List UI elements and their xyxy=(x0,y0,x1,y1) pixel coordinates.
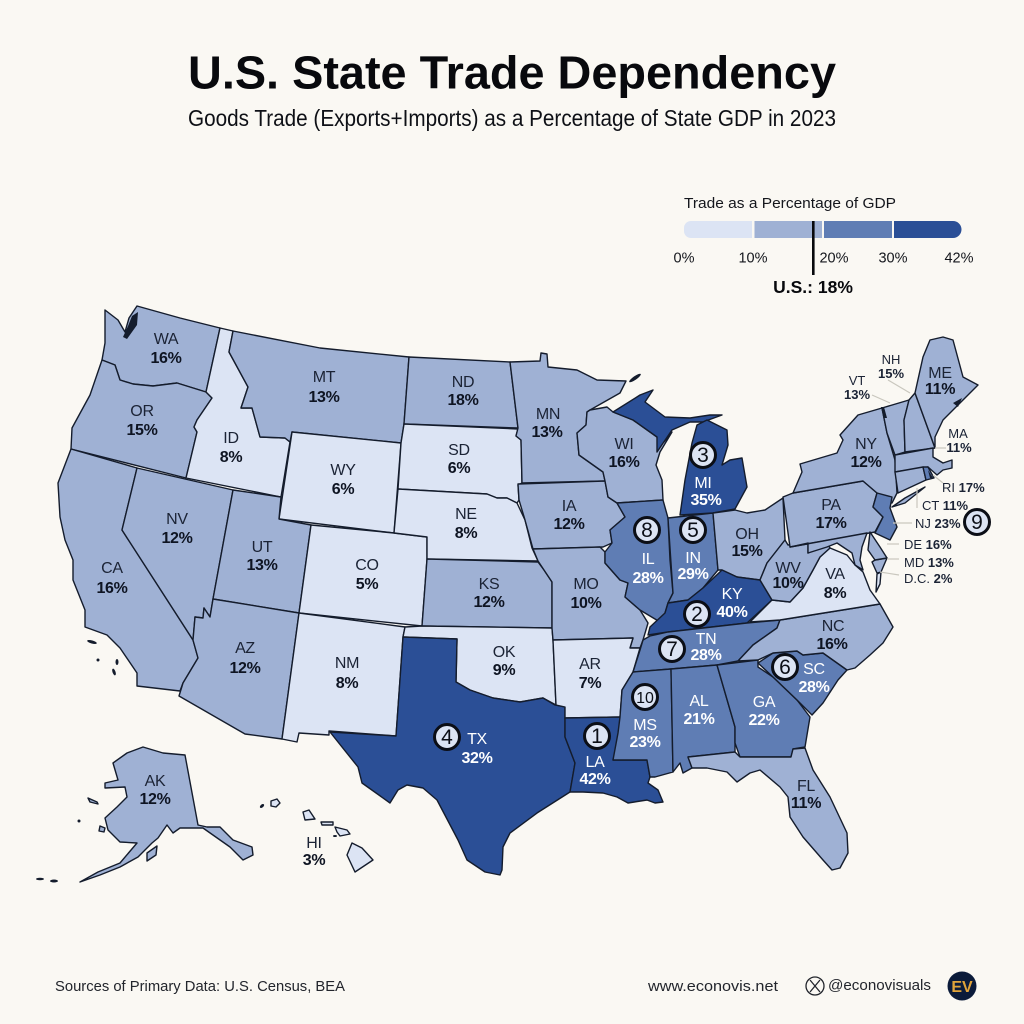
label: NH: NH xyxy=(882,352,900,367)
state: SD: SD xyxy=(448,442,470,459)
state: NM: 8% xyxy=(336,675,358,692)
state: MO xyxy=(533,547,648,648)
state: MI xyxy=(613,390,747,515)
label: MA xyxy=(946,426,972,455)
state: MN: MN xyxy=(536,406,560,423)
state: AL xyxy=(671,665,735,773)
subtitle: Goods Trade (Exports+Imports) as a Percentage of State GDP in 2023 xyxy=(188,105,836,131)
state: PA: PA xyxy=(821,497,841,514)
state: OH: OH xyxy=(735,526,759,543)
state: IN: 29% xyxy=(677,566,709,583)
legend title: Trade as a Percentage of GDP xyxy=(684,195,896,212)
legend scale labels: 20% xyxy=(819,250,849,266)
state: GA xyxy=(717,660,810,757)
map of U.S. states xyxy=(36,306,978,882)
state: WV: 10% xyxy=(772,575,804,592)
state: RI xyxy=(923,467,934,480)
state: TX: TX xyxy=(467,731,488,748)
label: VT: VT xyxy=(849,373,865,388)
Kodiak island xyxy=(147,846,157,861)
state: SC xyxy=(758,651,847,715)
state: TX xyxy=(330,637,575,875)
state: WY: WY xyxy=(330,462,356,479)
state: UT: 13% xyxy=(246,557,278,574)
legend scale labels: 42% xyxy=(944,250,974,266)
badge 3: 3 xyxy=(697,444,709,467)
state: LA: 42% xyxy=(579,771,611,788)
state: ND: ND xyxy=(452,374,474,391)
title: U.S. State Trade Dependency xyxy=(188,46,836,98)
icon: X logo xyxy=(806,977,824,995)
state: ME: ME xyxy=(928,365,952,382)
state: OK: OK xyxy=(493,644,516,661)
state: IA: 12% xyxy=(553,516,585,533)
state: LA: LA xyxy=(586,754,605,771)
badge 10: 10 xyxy=(636,690,654,707)
state: NH xyxy=(904,393,935,452)
U.S. average label: U.S.: 18% xyxy=(773,277,853,297)
state: OR: OR xyxy=(130,403,154,420)
social handle: @econovisuals xyxy=(828,977,931,994)
state: TN: TN xyxy=(696,631,716,648)
state: NE: NE xyxy=(455,506,477,523)
state: MI: 35% xyxy=(690,492,722,509)
state: VT xyxy=(882,400,909,455)
state: UT xyxy=(213,490,311,613)
state: IL: IL xyxy=(642,551,655,568)
state: HI: HI xyxy=(306,835,322,852)
state: IN: IN xyxy=(685,550,701,567)
state: AL: AL xyxy=(690,693,709,710)
label: NH: 15% xyxy=(878,366,904,381)
leader lines for northeastern states xyxy=(872,380,946,575)
state: MT: 13% xyxy=(308,389,340,406)
St. Lawrence and Nunivak islands xyxy=(88,798,98,804)
state: WI: WI xyxy=(615,436,633,453)
state: MS: MS xyxy=(633,717,657,734)
state: AL: 21% xyxy=(683,711,715,728)
state: KY: KY xyxy=(722,586,743,603)
badge 9: 9 xyxy=(971,511,983,534)
badge 8: 8 xyxy=(641,519,653,542)
state: AR: 7% xyxy=(579,675,601,692)
state: IA xyxy=(518,481,625,549)
Long Island xyxy=(892,487,925,507)
state: NV: NV xyxy=(166,511,188,528)
label: RI: RI 17% xyxy=(942,480,985,495)
state: NM xyxy=(282,613,405,742)
legend xyxy=(674,195,974,297)
badge 5: 5 xyxy=(687,519,699,542)
state: CO: 5% xyxy=(356,576,378,593)
state: WA xyxy=(102,306,220,392)
state: SD: 6% xyxy=(448,460,470,477)
state: MN: 13% xyxy=(531,424,563,441)
state: WY xyxy=(279,432,401,533)
label: D.C.: D.C. 2% xyxy=(904,571,953,586)
state: ID xyxy=(186,328,290,497)
state: FL: FL xyxy=(797,778,815,795)
state: SC: 28% xyxy=(798,679,830,696)
state: NV: 12% xyxy=(161,530,193,547)
state: SC: SC xyxy=(803,661,825,678)
state: MT: MT xyxy=(313,369,336,386)
state: CO xyxy=(299,525,427,626)
state: AZ xyxy=(179,599,299,739)
state: VA: VA xyxy=(825,566,845,583)
state: IL xyxy=(605,500,673,622)
legend scale labels: 0% xyxy=(674,250,695,266)
source note: Sources of Primary Data: U.S. Census, BEA xyxy=(55,979,345,995)
state: CT xyxy=(895,467,926,493)
state: TN xyxy=(633,620,780,672)
website: www.econovis.net xyxy=(647,978,779,995)
state: PA xyxy=(783,481,883,547)
state: OR xyxy=(71,360,212,478)
state: GA: 22% xyxy=(748,712,780,729)
state: ID: ID xyxy=(223,430,239,447)
legend scale labels: 30% xyxy=(878,250,908,266)
state: NY xyxy=(793,408,925,507)
state: CO: CO xyxy=(355,557,379,574)
state: NY: NY xyxy=(855,436,877,453)
state: MS: 23% xyxy=(629,734,661,751)
state: AK: 12% xyxy=(139,791,171,808)
state: NC: NC xyxy=(822,618,844,635)
state: MA xyxy=(895,448,952,475)
state: OH xyxy=(713,498,785,580)
state: WY: 6% xyxy=(332,481,354,498)
state: ME xyxy=(915,337,978,448)
state: ND: 18% xyxy=(447,392,479,409)
state: MI: MI xyxy=(694,475,712,492)
label: VT xyxy=(844,373,870,402)
badge 1: 1 xyxy=(591,725,603,748)
state: ID: 8% xyxy=(220,449,242,466)
state: PA: 17% xyxy=(815,515,847,532)
state: NE xyxy=(394,489,538,561)
state: TX: 32% xyxy=(461,750,493,767)
label: MA: 11% xyxy=(946,440,972,455)
badge 6: 6 xyxy=(779,656,791,679)
state: AK: AK xyxy=(145,773,166,790)
U.S. average marker xyxy=(812,221,815,275)
state: OR: 15% xyxy=(126,422,158,439)
state: VA xyxy=(750,548,880,622)
state: DE xyxy=(868,532,887,560)
state: ND xyxy=(404,357,518,428)
Virginia eastern shore xyxy=(876,572,881,592)
state: KY xyxy=(648,570,772,635)
state: AR xyxy=(553,638,640,718)
state: AZ: AZ xyxy=(235,640,255,657)
state: IA: IA xyxy=(562,498,577,515)
state: MS xyxy=(613,669,673,777)
badge 4: 4 xyxy=(441,726,453,749)
lake and coast details xyxy=(36,312,962,882)
state: GA: GA xyxy=(753,694,776,711)
label: MA: MA xyxy=(948,426,968,441)
badge 9 xyxy=(964,510,990,534)
state: CA: 16% xyxy=(96,580,128,597)
state: UT: UT xyxy=(252,539,273,556)
state: FL: 11% xyxy=(791,795,821,812)
label: VT: 13% xyxy=(844,387,870,402)
state: IN xyxy=(668,513,718,603)
badge 7: 7 xyxy=(666,638,678,661)
small state labels xyxy=(844,352,985,586)
state: HI xyxy=(271,799,373,872)
state: KS xyxy=(422,559,552,628)
state: WV xyxy=(760,540,830,602)
label: NH xyxy=(878,352,904,381)
state: IL: 28% xyxy=(632,570,664,587)
state: KY: 40% xyxy=(716,604,748,621)
state: NM: NM xyxy=(335,655,359,672)
state: KS: KS xyxy=(479,576,499,593)
state: OH: 15% xyxy=(731,543,763,560)
state: LA xyxy=(565,717,663,803)
state: VA: 8% xyxy=(824,585,846,602)
icon: EV logo: EV xyxy=(951,979,973,996)
state: FL xyxy=(688,748,848,870)
state: CA: CA xyxy=(101,560,123,577)
state: HI: 3% xyxy=(303,852,325,869)
label: MD: MD 13% xyxy=(904,555,954,570)
state: NJ xyxy=(873,493,897,540)
state: NC xyxy=(738,604,893,670)
label: NJ: NJ 23% xyxy=(915,516,961,531)
state: MD xyxy=(790,533,887,573)
state: OK xyxy=(403,626,556,705)
state: MT xyxy=(229,331,409,443)
state: NV xyxy=(122,468,233,640)
state: MO: 10% xyxy=(570,595,602,612)
state: CA xyxy=(58,449,198,691)
state: TN: 28% xyxy=(690,647,722,664)
state: AZ: 12% xyxy=(229,660,261,677)
icon: EV logo xyxy=(948,972,976,1000)
state: NY: 12% xyxy=(850,454,882,471)
state: WV: WV xyxy=(775,560,801,577)
state: KS: 12% xyxy=(473,594,505,611)
legend colour bar xyxy=(684,221,962,238)
badge 4 xyxy=(434,724,460,750)
state: NE: 8% xyxy=(455,525,477,542)
label: DE: DE 16% xyxy=(904,537,952,552)
state: OK: 9% xyxy=(493,662,515,679)
legend scale labels: 10% xyxy=(738,250,768,266)
state: WA: 16% xyxy=(150,350,182,367)
badge 2: 2 xyxy=(691,603,703,626)
state: MO: MO xyxy=(573,576,599,593)
state: MN xyxy=(510,353,626,483)
badge 7 xyxy=(660,636,684,662)
state: ME: 11% xyxy=(925,381,955,398)
label: CT: CT 11% xyxy=(922,498,968,513)
legend scale labels xyxy=(674,250,974,266)
state: AK xyxy=(80,747,253,882)
state: NC: 16% xyxy=(816,636,848,653)
state: AR: AR xyxy=(579,656,601,673)
state: WI: 16% xyxy=(608,454,640,471)
state: WI xyxy=(577,407,672,503)
state: WA: WA xyxy=(154,331,179,348)
state: SD xyxy=(398,424,522,503)
